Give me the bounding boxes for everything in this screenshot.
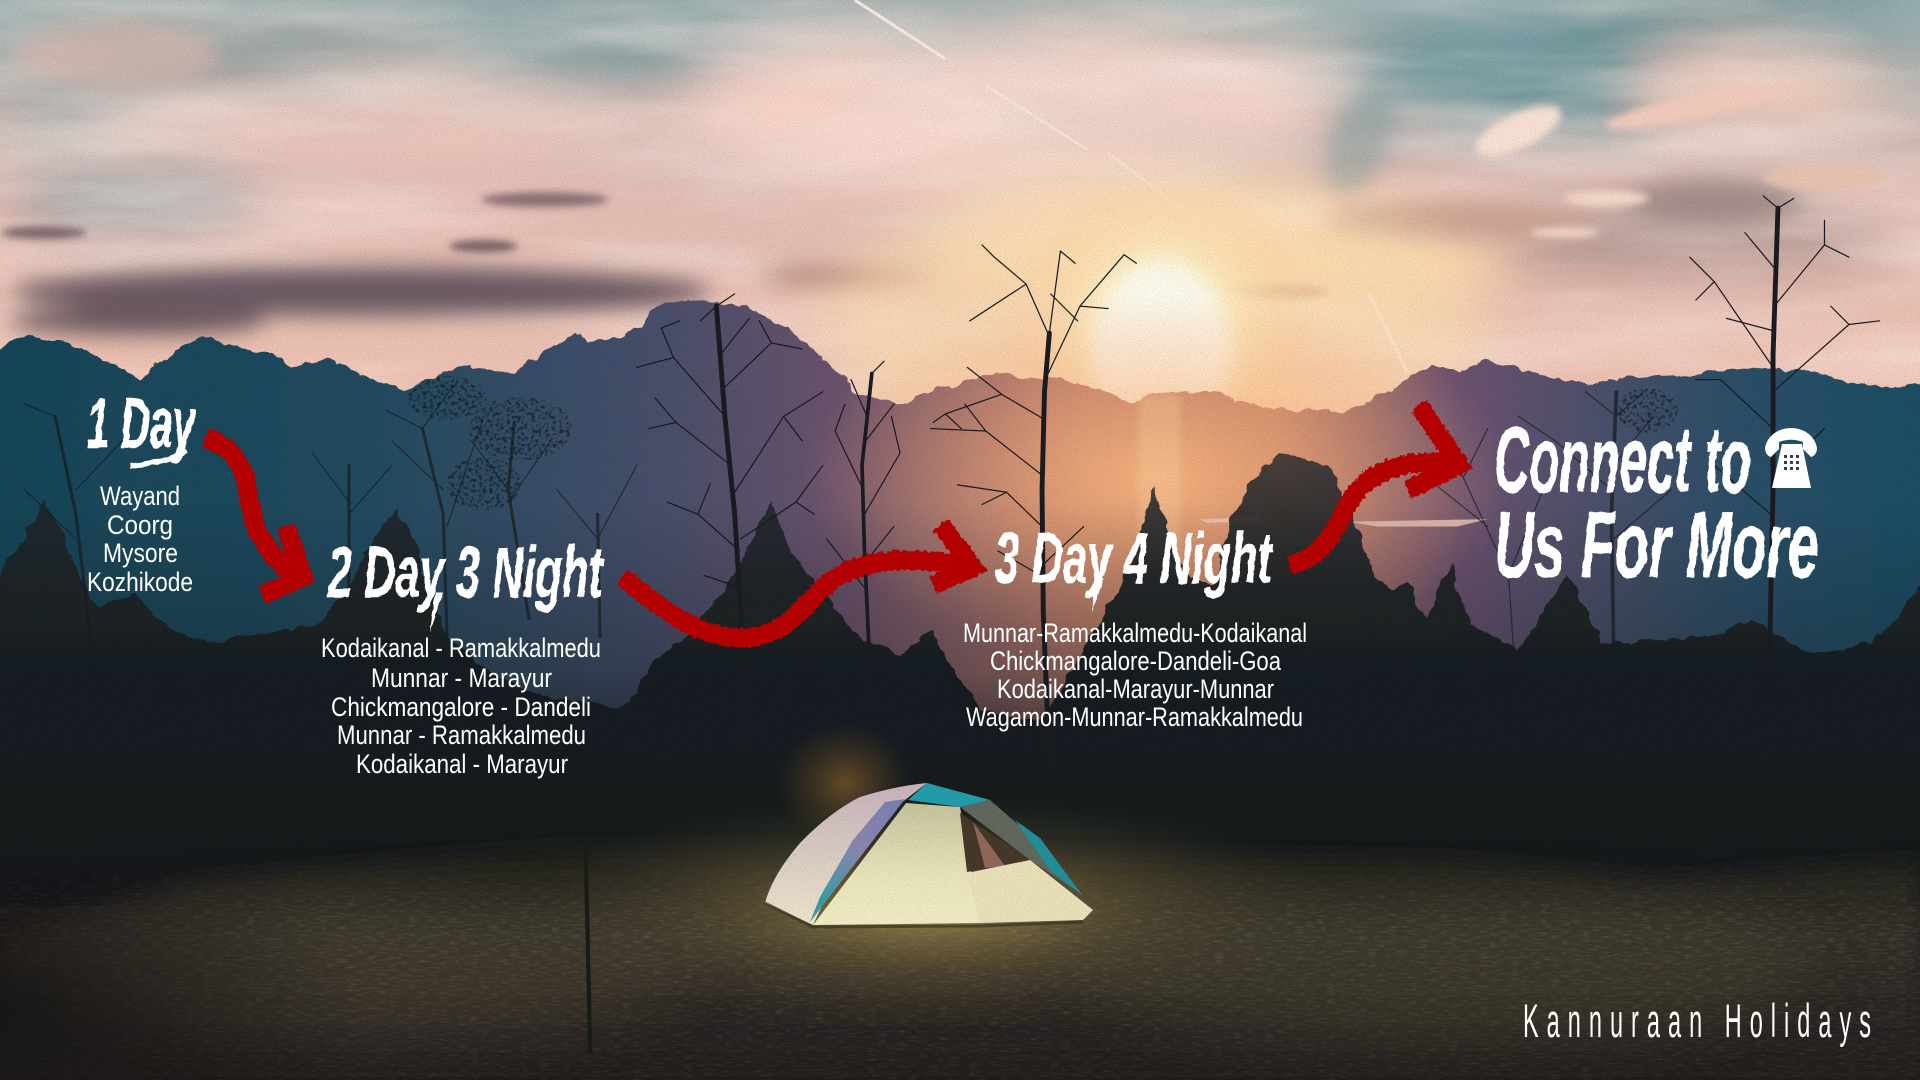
tent top	[908, 783, 990, 807]
sun	[827, 174, 1488, 468]
underline swash	[130, 450, 186, 466]
list: 2 day 3 night places: Munnar - Marayur	[371, 663, 552, 693]
list: 2 day 3 night places	[321, 633, 601, 779]
list: 3 day 4 night places: Wagamon-Munnar-Ramakkalmedu	[966, 702, 1303, 732]
tent	[765, 783, 1093, 927]
valley haze	[0, 502, 1920, 808]
list: 3 day 4 night places: Kodaikanal-Marayur-Munnar	[997, 674, 1274, 704]
mountains	[0, 294, 1920, 808]
list: 3 day 4 night places: Munnar-Ramakkalmedu-Kodaikanal	[963, 618, 1307, 648]
list: 1 day places: Wayand	[100, 481, 180, 511]
tent rain fly	[960, 800, 1083, 895]
tent stripe	[810, 799, 905, 922]
heading: 3 Day 4 Night	[995, 519, 1274, 613]
sky	[0, 0, 1920, 414]
arrow 1	[205, 438, 303, 595]
tent door	[960, 813, 1030, 872]
leafy canopy	[408, 376, 1678, 511]
bare trees	[24, 196, 1880, 765]
trees near connect	[1427, 389, 1671, 686]
list: 2 day 3 night places: Munnar - Ramakkalmedu	[337, 720, 586, 750]
grass ground	[0, 796, 1920, 1080]
trees left	[24, 386, 637, 649]
heading: 2 Day 3 Night: 2 Day 3 Night	[327, 533, 605, 613]
sun glow on mountains	[802, 294, 1512, 661]
list: 2 day 3 night places: Chickmangalore - Dandeli	[331, 692, 591, 722]
list: 3 day 4 night places: Chickmangalore-Dandeli-Goa	[990, 646, 1282, 676]
heading: 1 Day	[87, 384, 197, 466]
tent hem shadow	[765, 903, 1083, 927]
heading: 2 Day 3 Night	[327, 533, 605, 633]
tree centre	[931, 245, 1136, 765]
list: 3 day 4 night places	[963, 618, 1307, 732]
heading: 1 Day: 1 Day	[87, 384, 197, 464]
list: 1 day places: Kozhikode	[87, 567, 193, 597]
forest silhouette	[0, 453, 1920, 931]
arrow 2	[622, 525, 973, 638]
tent front panel	[813, 803, 980, 925]
list: 1 day places: Mysore	[103, 538, 178, 568]
cloud wisps	[0, 0, 1920, 404]
icon: telephone	[1765, 428, 1817, 488]
tree left of centre	[637, 294, 823, 747]
contrails	[855, 0, 1408, 373]
tree right	[1690, 196, 1880, 661]
tent left panel	[765, 783, 927, 925]
list: 1 day places	[87, 481, 193, 597]
arrow 3	[1290, 405, 1459, 566]
tree thin	[827, 361, 900, 710]
tent lower door	[967, 860, 1093, 923]
list: 1 day places: Coorg	[107, 510, 173, 540]
list: 2 day 3 night places: Kodaikanal - Marayur	[356, 749, 568, 779]
call to action	[1494, 407, 1819, 597]
brand name: Kannuraan Holidays	[1523, 994, 1871, 1047]
heading: 3 Day 4 Night: 3 Day 4 Night	[995, 519, 1274, 599]
list: 2 day 3 night places: Kodaikanal - Ramakkalmedu	[321, 633, 601, 663]
